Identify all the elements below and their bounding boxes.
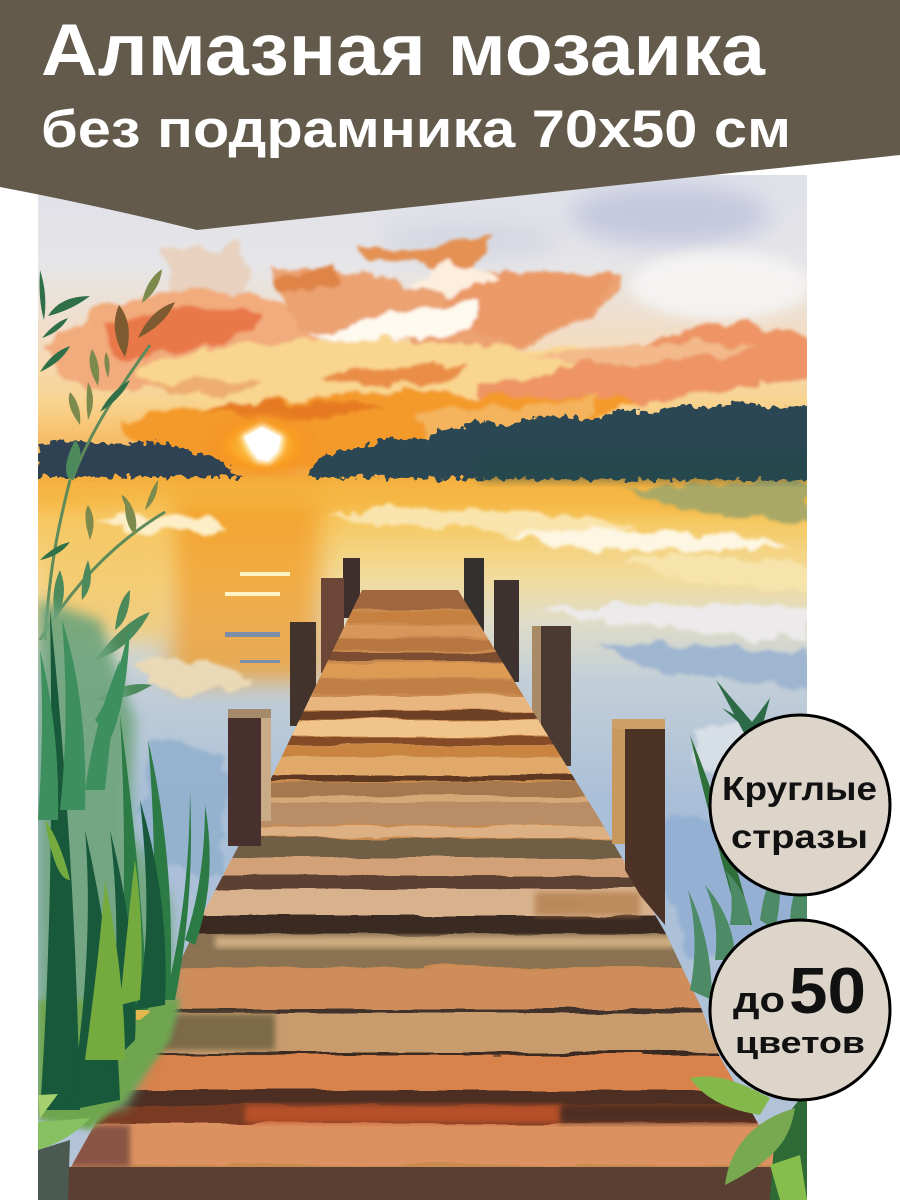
water xyxy=(38,477,807,1200)
subtitle: без подрамника 70х50 см xyxy=(41,100,791,159)
badge: round rhinestones xyxy=(710,715,890,895)
badge: round rhinestones: стразы xyxy=(731,818,868,855)
reeds right xyxy=(688,680,807,1000)
badge: up to 50 colours: цветов xyxy=(735,1025,865,1060)
grass clump left xyxy=(38,600,210,1200)
reeds and leaves left xyxy=(40,269,175,700)
badge: round rhinestones: Круглые xyxy=(722,770,877,807)
far treeline xyxy=(38,402,815,480)
title: Алмазная мозаика xyxy=(41,10,767,91)
clouds xyxy=(45,185,810,470)
badge: up to 50 colours: до xyxy=(733,979,785,1020)
pier posts far xyxy=(290,558,571,766)
pier deck xyxy=(71,590,774,1167)
pier posts near xyxy=(228,709,665,925)
leaves bottom right xyxy=(690,1076,807,1200)
pier bottom edge xyxy=(68,1167,807,1200)
sky xyxy=(38,175,807,480)
painting: lake sunset with pier xyxy=(38,175,815,1200)
sun xyxy=(226,414,302,476)
header banner xyxy=(0,0,900,230)
badge: up to 50 colours xyxy=(710,920,890,1100)
badge: up to 50 colours: 50 xyxy=(789,954,866,1027)
